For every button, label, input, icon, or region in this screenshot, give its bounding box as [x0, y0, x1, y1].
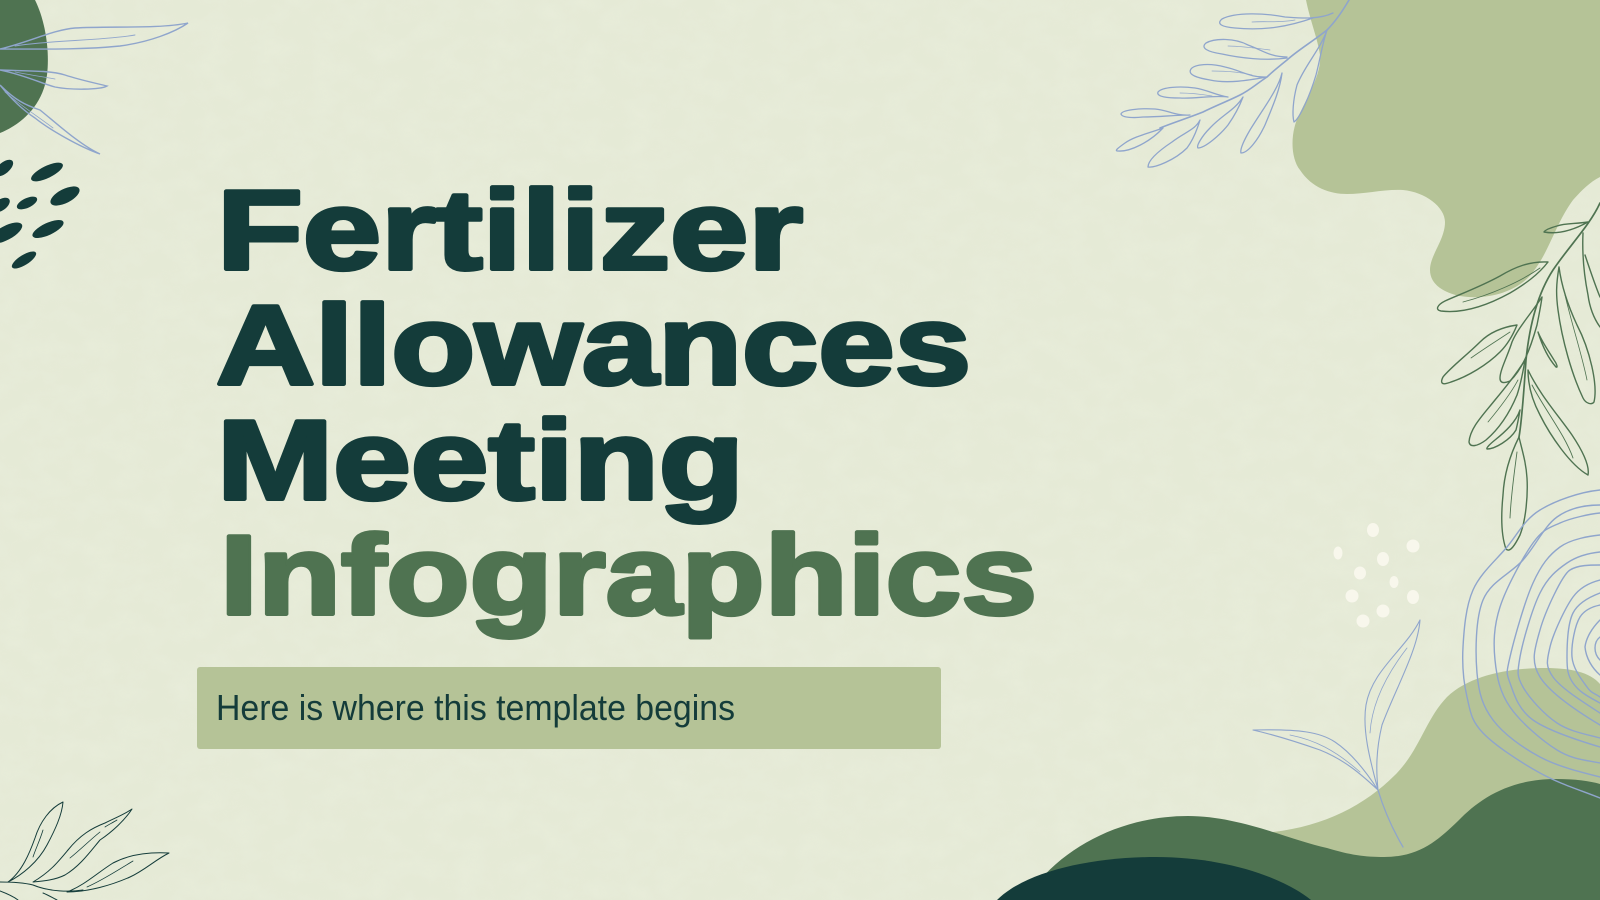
icon: top-left blue leaves	[0, 23, 188, 154]
icon: concentric blue rings	[1463, 490, 1600, 798]
blob: bottom-right sage wave	[1240, 668, 1600, 900]
subtitle text: Here is where this template begins	[216, 687, 735, 728]
title line: Allowances: Allowances	[216, 282, 971, 408]
icon: top-left dark dashes	[0, 157, 82, 272]
icon: bottom-left dark leaves	[0, 802, 169, 900]
blob: top-right sage shape	[1293, 0, 1600, 297]
subtitle bar	[197, 667, 941, 749]
blob: bottom darkest wave	[997, 857, 1311, 900]
title line: Infographics: Infographics	[220, 512, 1037, 638]
title line: Fertilizer: Fertilizer	[217, 167, 803, 293]
icon: cream dots	[1334, 523, 1420, 628]
icon: right green branch	[1438, 203, 1600, 550]
title	[216, 167, 1037, 638]
subtitle background	[197, 667, 941, 749]
blob: bottom-right dark green wave	[1025, 779, 1600, 900]
icon: bottom blue plant	[1253, 620, 1420, 847]
icon: top-right blue branch	[1116, 0, 1349, 167]
title line: Meeting: Meeting	[217, 397, 744, 523]
blob: top-left green circle	[0, 0, 48, 133]
